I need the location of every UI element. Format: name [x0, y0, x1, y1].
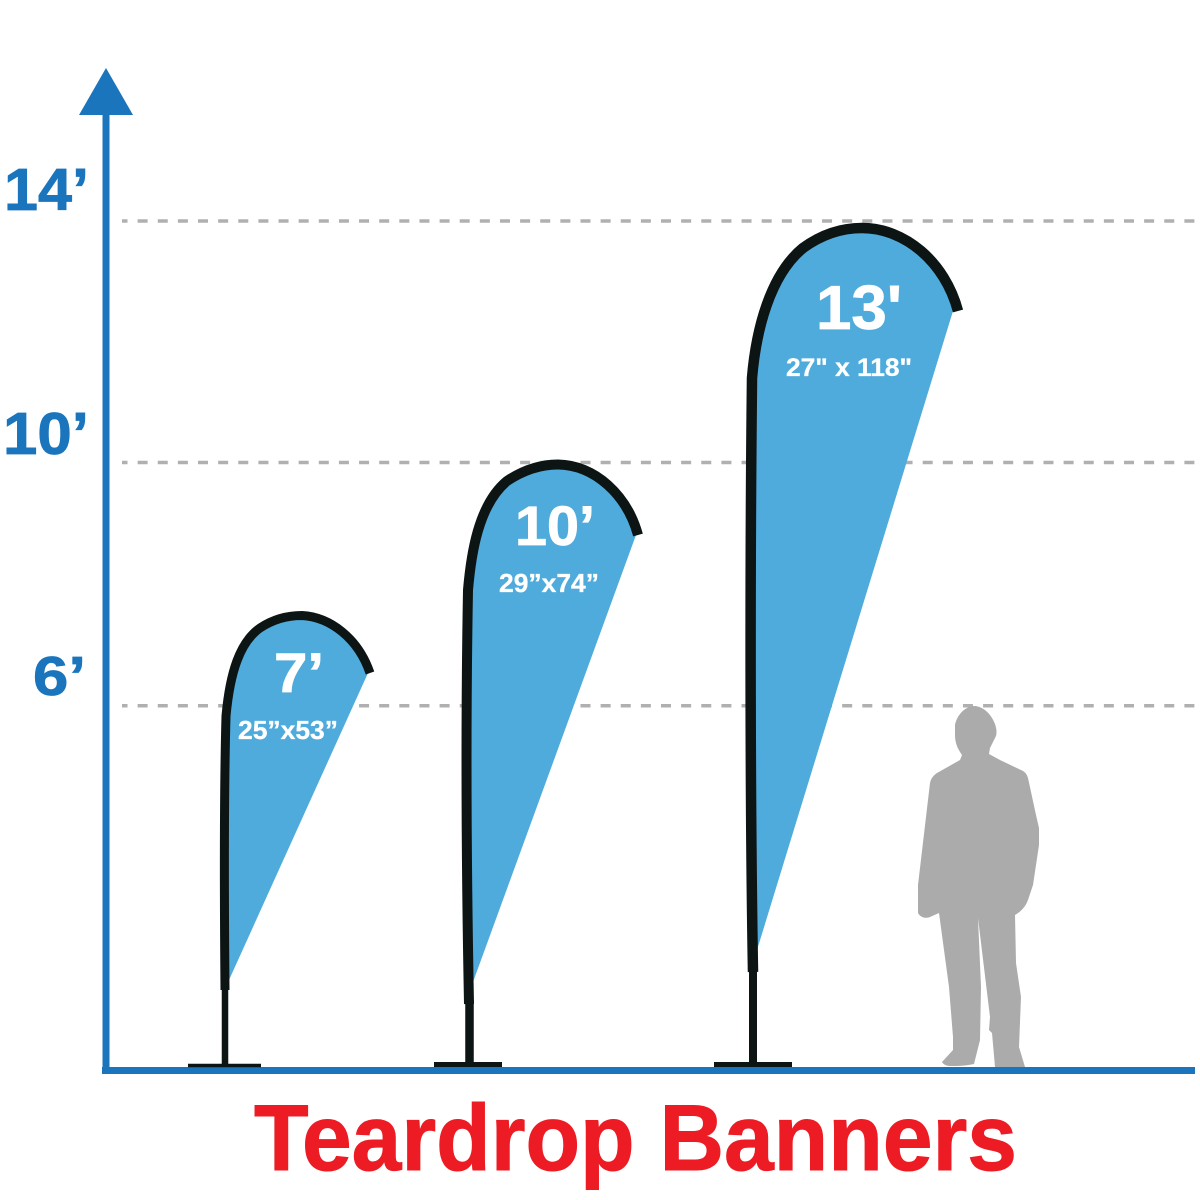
- banner: 7 foot: [188, 616, 370, 1066]
- axis: vertical height arrow: [79, 68, 133, 1074]
- banner size 27x118: 27" x 118": [786, 354, 912, 382]
- label: 10 feet: 10’: [3, 401, 89, 467]
- icon: human silhouette: [918, 706, 1039, 1067]
- banner: 10 foot: [434, 464, 638, 1064]
- banner title 7: 7’: [274, 641, 324, 704]
- banner size 25x53: 25”x53”: [238, 715, 338, 745]
- axis: ground line: [102, 1067, 1195, 1074]
- title: Teardrop Banners: [254, 1085, 1017, 1190]
- banner title 10: 10’: [515, 494, 595, 557]
- banner: 13 foot: [714, 228, 958, 1064]
- banner size 29x74: 29”x74”: [499, 568, 599, 598]
- label: 6 feet: 6’: [33, 645, 86, 707]
- label: 14 feet: 14’: [4, 157, 89, 223]
- banner title 13: 13': [816, 274, 902, 343]
